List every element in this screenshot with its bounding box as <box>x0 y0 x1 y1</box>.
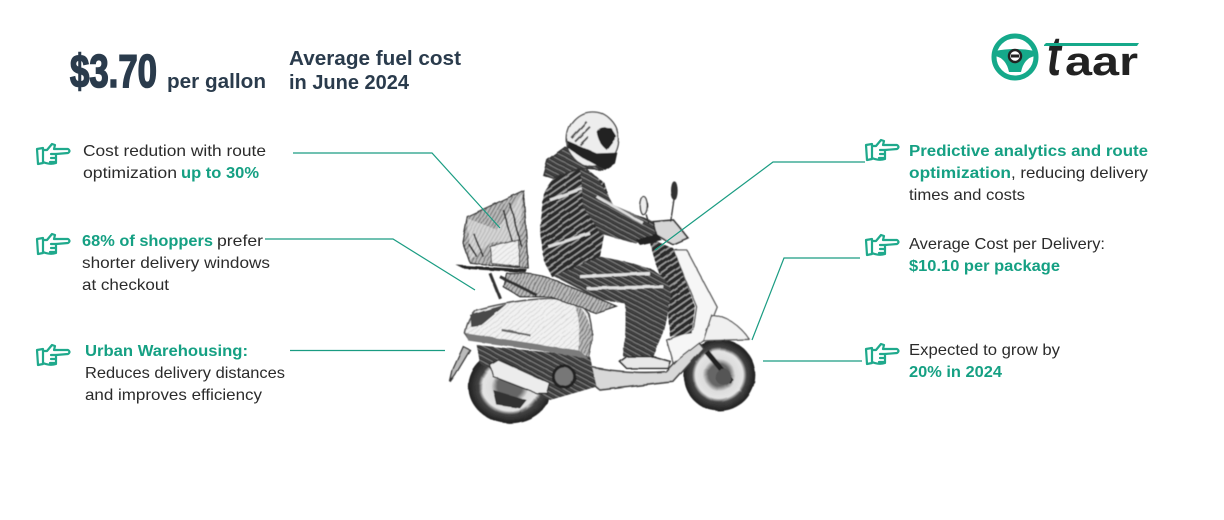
heading: fuel price: $3.70 <box>70 45 157 97</box>
delivery bag <box>463 191 529 268</box>
text: cost per delivery <box>909 236 1105 275</box>
left item 2 <box>37 233 270 294</box>
heading: average fuel cost: in June 2024 <box>289 72 410 94</box>
front shield <box>647 237 749 363</box>
text: expected growth: 20% in 2024 <box>909 364 1002 381</box>
scooter rider illustration <box>450 112 755 423</box>
text: cost reduction: optimization <box>83 165 177 182</box>
text: urban warehousing: and improves efficiency <box>85 387 262 404</box>
right item 2 <box>866 235 1105 275</box>
text: cost reduction <box>83 143 266 182</box>
icon: pointing hand <box>866 344 898 364</box>
scooter body <box>465 298 592 358</box>
icon: pointing hand <box>866 235 898 255</box>
logo wordmark: aar <box>1065 40 1138 84</box>
text: urban warehousing: Urban Warehousing: <box>85 343 248 360</box>
text: shoppers: prefer <box>217 233 264 250</box>
right item 1 <box>866 140 1148 204</box>
text: expected growth: Expected to grow by <box>909 342 1060 359</box>
left item 1 <box>37 143 266 182</box>
logo wordmark: t <box>1047 24 1063 87</box>
text: predictive analytics <box>909 143 1148 204</box>
hood <box>543 147 603 178</box>
logo wordmark <box>1047 24 1138 87</box>
right item 3 <box>866 342 1060 381</box>
icon: pointing hand <box>37 144 70 164</box>
text: predictive analytics: optimization <box>909 165 1011 182</box>
icon: pointing hand <box>37 345 70 365</box>
text: shoppers <box>82 233 270 294</box>
icon: steering wheel <box>994 36 1036 78</box>
logo bar <box>1044 43 1139 46</box>
text: expected growth <box>909 342 1060 381</box>
text: cost per delivery: Average Cost per Delivery: <box>909 236 1105 253</box>
helmet <box>567 112 619 170</box>
left item 3 <box>37 343 285 404</box>
text: cost reduction: up to 30% <box>181 165 259 182</box>
text: urban warehousing: Reduces delivery distances <box>85 365 285 382</box>
rider leg <box>552 257 671 368</box>
text: shoppers: at checkout <box>82 277 170 294</box>
logo: taar <box>994 24 1139 87</box>
text: cost per delivery: $10.10 per package <box>909 258 1060 275</box>
heading: fuel price: per gallon <box>167 71 266 93</box>
rear wheel <box>468 350 552 423</box>
icon: pointing hand <box>37 234 70 254</box>
text: urban warehousing <box>85 343 285 404</box>
rider torso <box>540 165 610 277</box>
text: shoppers: shorter delivery windows <box>82 255 270 272</box>
front wheel <box>683 339 755 411</box>
text: shoppers: 68% of shoppers <box>82 233 213 250</box>
seat <box>490 273 617 313</box>
rider arm and glove <box>580 167 688 245</box>
heading: average fuel cost <box>289 48 461 94</box>
text: predictive analytics: Predictive analytics and route <box>909 143 1148 160</box>
text: predictive analytics: times and costs <box>909 187 1025 204</box>
heading: fuel price <box>70 45 266 97</box>
text: cost reduction: Cost redution with route <box>83 143 266 160</box>
connector lines <box>265 153 865 361</box>
heading: average fuel cost: Average fuel cost <box>289 48 461 70</box>
icon: pointing hand <box>866 140 898 160</box>
mirrors <box>640 182 677 224</box>
rack <box>456 265 527 273</box>
scooter floor and engine <box>450 340 703 400</box>
text: predictive analytics: , reducing delivery <box>1011 165 1148 182</box>
